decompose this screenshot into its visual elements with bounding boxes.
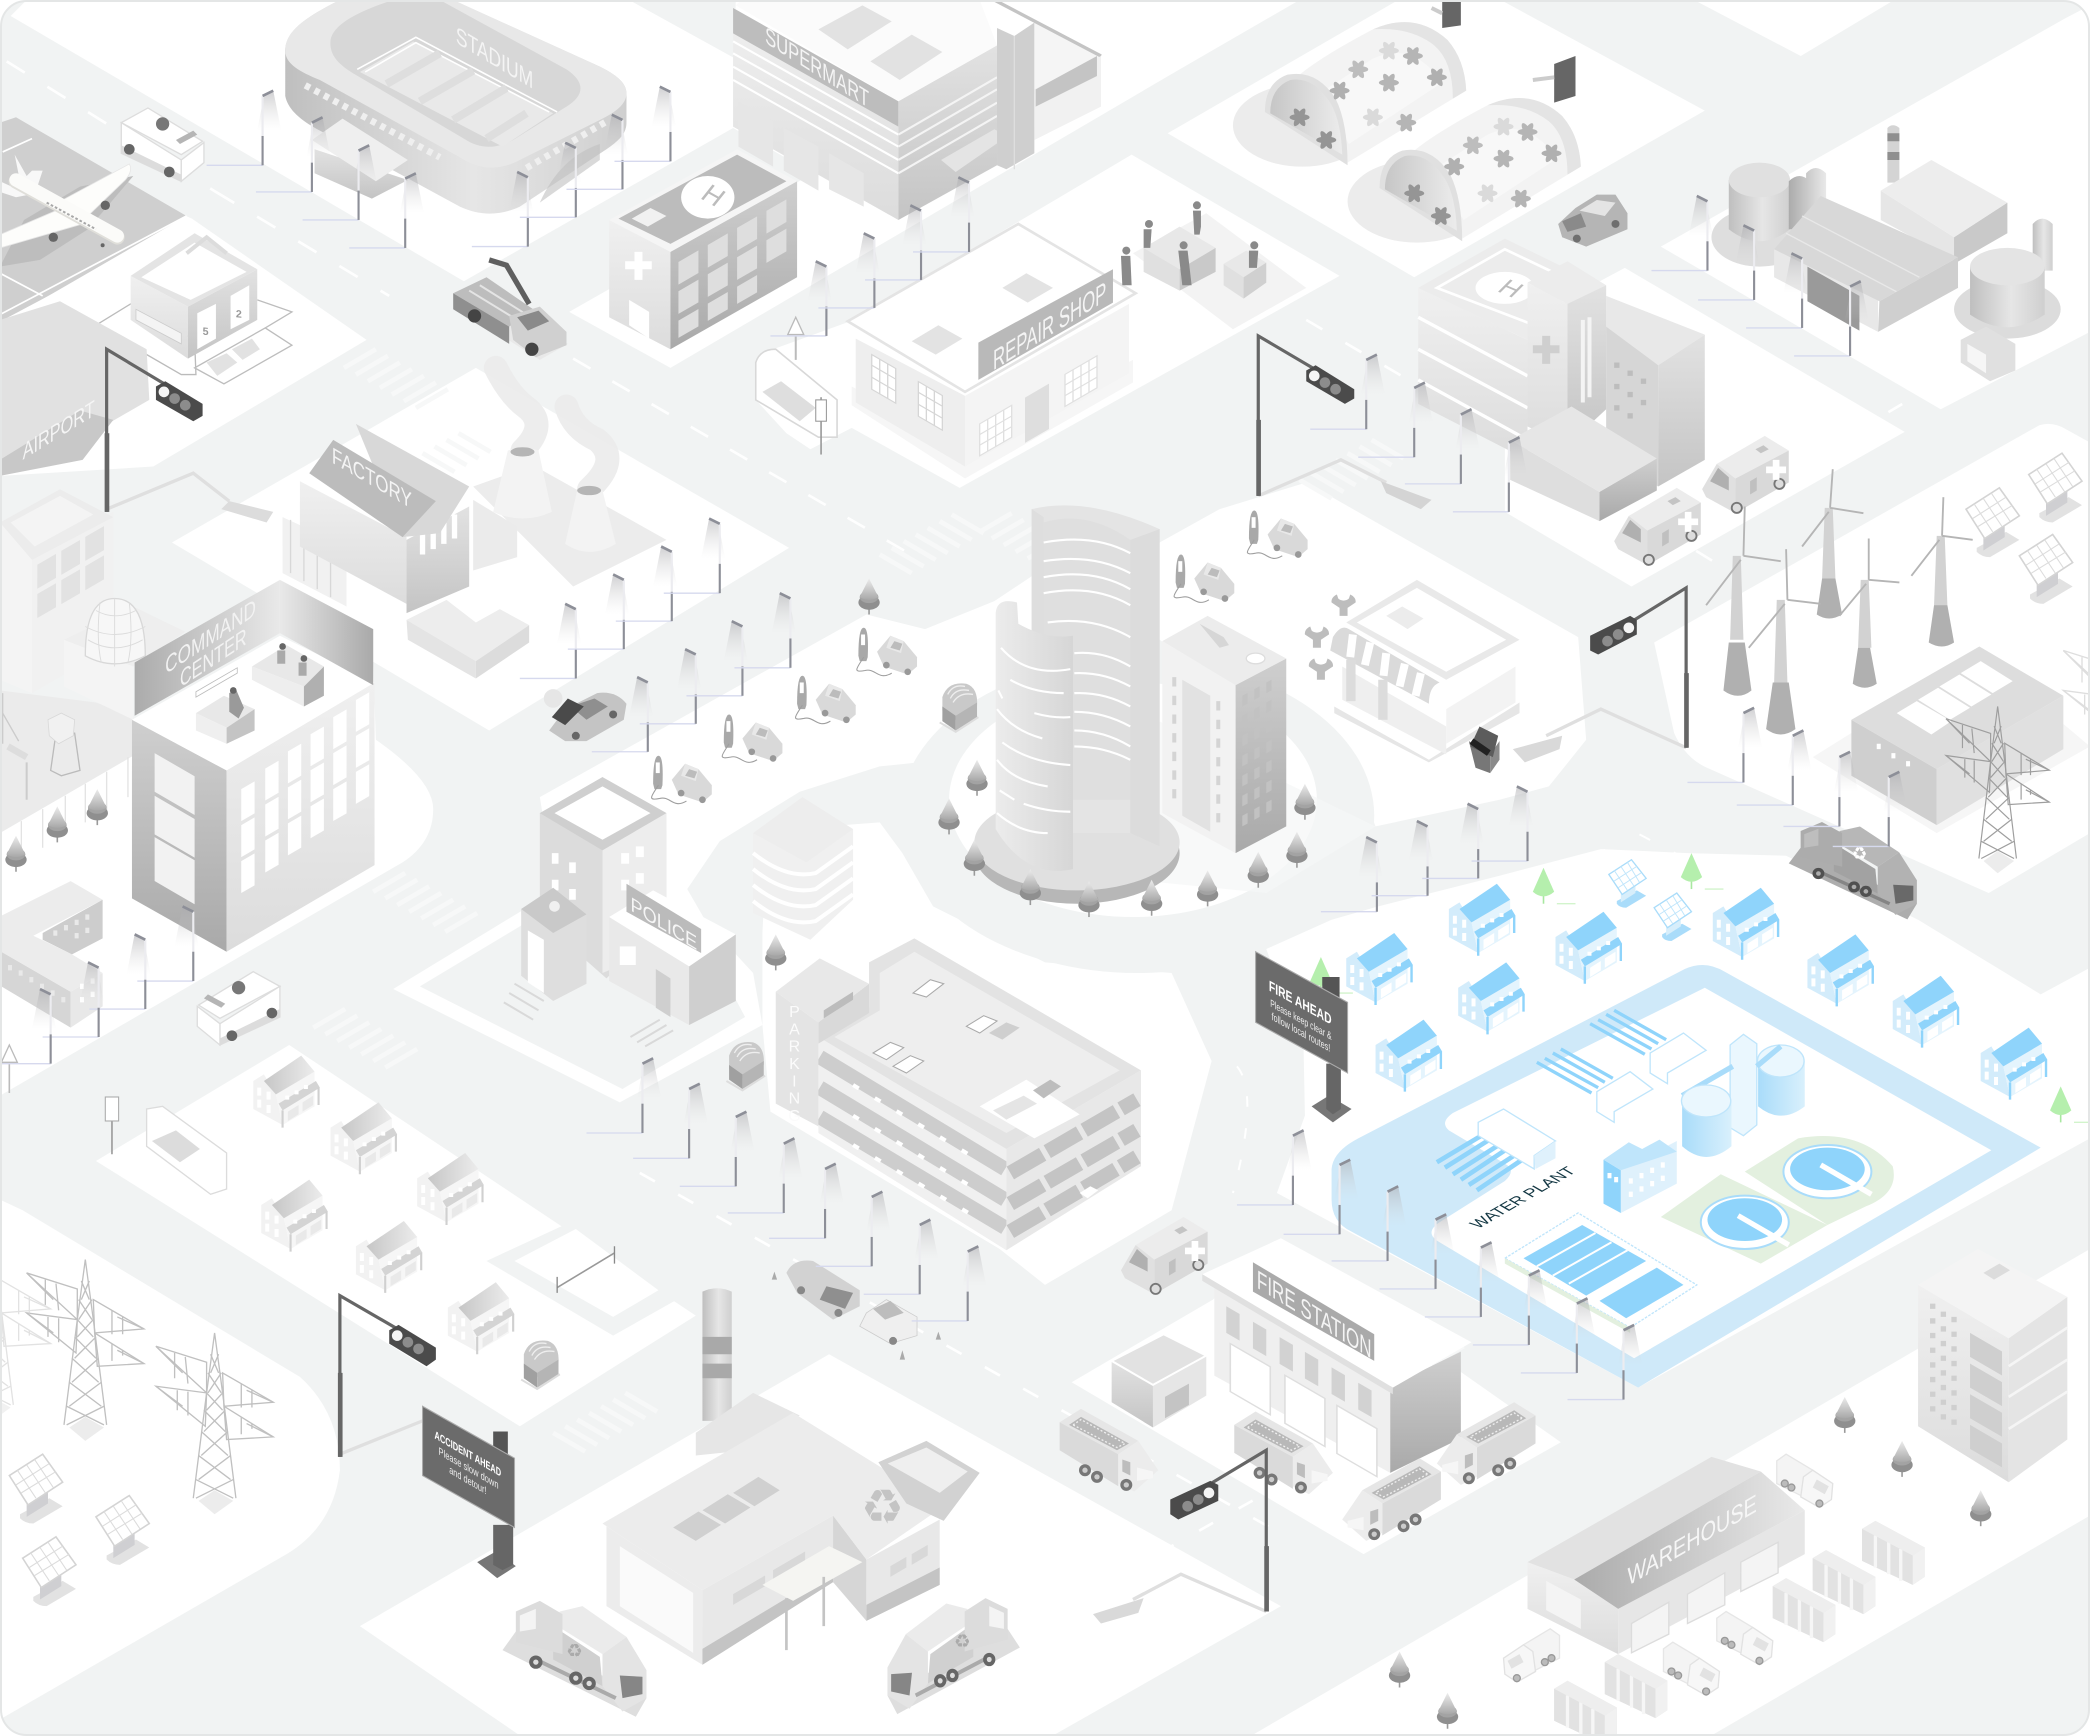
corner market <box>1330 580 1520 762</box>
right garbage truck: ♻ <box>954 1630 971 1651</box>
delivery vans <box>1504 1454 1833 1695</box>
light head: right <box>1590 616 1637 654</box>
gray houses <box>253 1056 515 1354</box>
parking label: G <box>788 1108 801 1125</box>
fire station label: FIRE STATION <box>1257 1265 1372 1365</box>
charging depot: 2 <box>236 308 242 321</box>
repair shop label: REPAIR SHOP <box>993 276 1106 377</box>
drones <box>1305 594 1356 680</box>
sedimentation basins <box>1505 1213 1697 1328</box>
apartment block <box>1162 616 1286 853</box>
billboard: accident ahead: and detour! <box>449 1465 487 1497</box>
crates <box>1554 1521 1925 1736</box>
parking label: A <box>789 1021 800 1038</box>
blue solar panels <box>1609 860 1691 941</box>
factory label: FACTORY <box>332 443 412 514</box>
billboard: fire ahead: Please keep clear & <box>1270 998 1332 1043</box>
panel: water plant grounds <box>1332 965 2041 1388</box>
fire trucks <box>1060 1402 1536 1541</box>
right apartment tower <box>1918 1249 2067 1482</box>
ambulances <box>1614 436 1789 565</box>
recycling plant <box>602 1288 980 1665</box>
bus shelter and warning sign <box>756 317 837 455</box>
billboard: accident ahead: ACCIDENT AHEAD <box>435 1428 501 1480</box>
stadium <box>285 0 626 214</box>
ev charging stations <box>652 511 1308 804</box>
supermart building <box>733 0 1101 220</box>
bus shuttles <box>121 108 280 1045</box>
charging depot <box>96 233 292 384</box>
airport terminal <box>0 301 149 476</box>
blue houses <box>1346 884 2047 1100</box>
parking label: P <box>789 1004 800 1021</box>
light head: airport <box>156 381 203 421</box>
fire station <box>1202 1238 1472 1477</box>
factory with cooling towers <box>283 368 666 678</box>
parking label: N <box>789 1091 800 1108</box>
repair shop <box>848 224 1136 479</box>
warehouse on wind farm edge <box>1813 646 2090 833</box>
light head: lower left <box>389 1325 436 1366</box>
settling pipes one <box>1437 1134 1526 1190</box>
traffic light shadows <box>107 460 1686 1623</box>
water plant label: WATER PLANT <box>1465 1164 1580 1231</box>
tow truck <box>453 260 568 360</box>
broken-down car <box>544 689 626 741</box>
recycling plant: ♻ <box>861 1482 904 1535</box>
ambulance on road <box>1121 1217 1208 1294</box>
refinery complex <box>1711 125 2061 381</box>
hospital two <box>1418 239 1705 521</box>
trees <box>5 578 1991 1729</box>
control building <box>1621 1141 1677 1213</box>
recycling bins <box>521 683 978 1389</box>
greenhouse pair <box>1233 0 1581 243</box>
left bus shelter and signs <box>1 1045 227 1194</box>
small striped tower <box>752 825 853 940</box>
solar panels <box>9 453 2082 1606</box>
clarifier one <box>1661 1174 1827 1264</box>
police station <box>504 777 736 1046</box>
airfield apron with plane <box>0 117 191 324</box>
left garbage truck: ♻ <box>566 1640 583 1661</box>
crashed cars <box>772 1261 941 1360</box>
police label: POLICE <box>630 892 697 955</box>
left pylons <box>27 1260 273 1514</box>
dark garbage truck: ♻ <box>1852 844 1867 864</box>
billboard: accident ahead: Please slow down <box>439 1446 499 1492</box>
charging depot: 5 <box>203 326 209 338</box>
parking label: I <box>792 1073 797 1090</box>
parking garage <box>776 938 1141 1250</box>
wind turbines <box>1706 469 1973 734</box>
L-shaped dormitory <box>1 881 103 1028</box>
panel: police pad <box>420 926 745 1089</box>
traffic lights <box>105 336 1689 1611</box>
left garbage truck <box>503 1601 646 1717</box>
airport label: AIRPORT <box>23 396 95 465</box>
light head: fire station <box>1170 1481 1218 1520</box>
taxi <box>1558 195 1627 247</box>
supermart label: SUPERMART <box>765 21 869 114</box>
water plant equipment <box>1437 1010 1894 1333</box>
stadium entrance canopy <box>312 119 408 199</box>
billboard: accident ahead <box>423 1406 516 1578</box>
central curved tower <box>974 505 1180 904</box>
clarifier two <box>1745 1136 1894 1225</box>
fire station annex <box>1112 1334 1206 1428</box>
street lamps <box>0 87 1907 1400</box>
light head: top centre <box>1306 365 1354 404</box>
command center <box>132 580 375 952</box>
billboard: fire ahead: FIRE AHEAD <box>1269 978 1332 1029</box>
command center label: COMMAND <box>165 593 256 680</box>
warehouse label: WAREHOUSE <box>1627 1488 1757 1592</box>
dark pylon by wind farm <box>1946 706 2049 873</box>
parking label: R <box>789 1039 800 1056</box>
dark garbage truck <box>1789 822 1917 919</box>
hospital <box>609 149 797 349</box>
command center: CENTER <box>180 622 247 693</box>
hospital: H <box>696 179 731 212</box>
left office tower and dome <box>38 526 146 719</box>
parking label: K <box>789 1056 800 1073</box>
overflowing bin <box>1469 726 1500 773</box>
tennis court <box>487 1220 686 1336</box>
edge pylons <box>0 637 2090 1421</box>
repair workers pad <box>1121 201 1306 329</box>
right garbage truck <box>887 1598 1020 1714</box>
hospital two: H <box>1492 276 1529 302</box>
billboard: fire ahead: follow local routes! <box>1272 1011 1330 1055</box>
green trees <box>1310 853 2090 1122</box>
warehouse <box>1528 1457 1805 1654</box>
billboard: fire ahead <box>1256 952 1352 1122</box>
roundabout <box>914 684 1374 973</box>
stadium label: STADIUM <box>456 21 533 95</box>
weather station pad <box>2 693 132 848</box>
storage tanks <box>1758 1061 1805 1116</box>
